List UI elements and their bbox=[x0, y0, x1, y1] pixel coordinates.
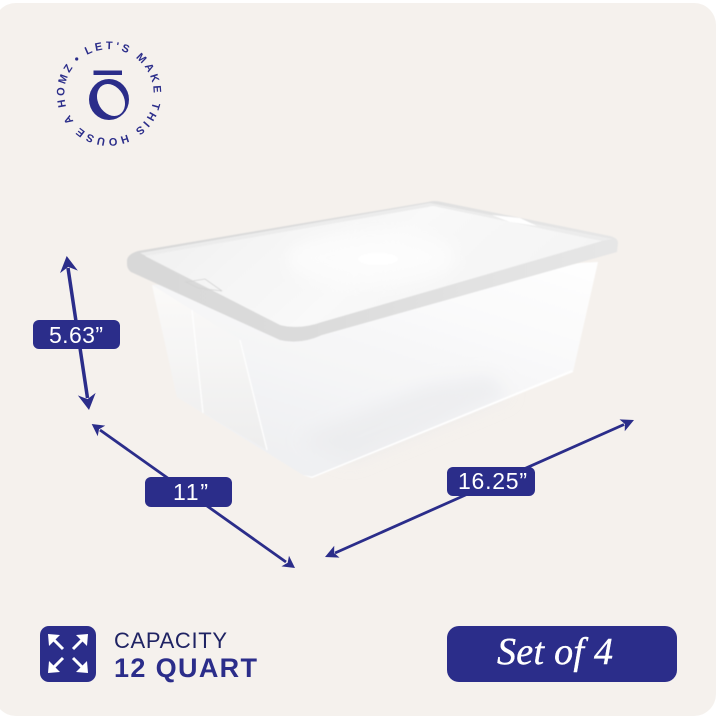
logo dot bbox=[75, 57, 78, 61]
lid rim bbox=[127, 201, 618, 342]
capacity text: 12 QUART bbox=[114, 653, 258, 683]
logo bar bbox=[94, 70, 122, 75]
label: 5.63: 5.63” bbox=[49, 322, 103, 348]
label: 11 bbox=[145, 477, 232, 507]
dimension arrow: width 11 bbox=[88, 419, 299, 573]
capacity text bbox=[114, 628, 258, 683]
lid handle right bbox=[492, 215, 537, 226]
lid centre glare bbox=[358, 253, 398, 265]
storage box photo bbox=[127, 201, 618, 478]
lid handle left bbox=[186, 279, 222, 291]
icon: capacity expand arrows bbox=[40, 626, 96, 682]
lid panel bbox=[145, 206, 602, 327]
box lid bbox=[127, 201, 618, 342]
logo circular text: LET'S MAKE THIS HOUSE A HOMZ bbox=[56, 42, 162, 146]
box body bbox=[152, 262, 598, 478]
badge: set of 4: Set of 4 bbox=[497, 631, 613, 673]
label: 16.25: 16.25” bbox=[458, 468, 527, 494]
badge: set of 4 bbox=[447, 626, 677, 682]
logo badge bbox=[56, 42, 162, 146]
logo letter O bbox=[89, 79, 131, 121]
dimension arrow: length 16.25 bbox=[322, 414, 637, 563]
capacity text: CAPACITY bbox=[114, 628, 227, 653]
label: 11: 11” bbox=[173, 479, 208, 505]
lid top rim highlight bbox=[140, 203, 612, 256]
label: 5.63 bbox=[33, 320, 120, 349]
lid soft sheen bbox=[285, 234, 455, 282]
dimension arrow: height 5.63 bbox=[33, 255, 120, 411]
